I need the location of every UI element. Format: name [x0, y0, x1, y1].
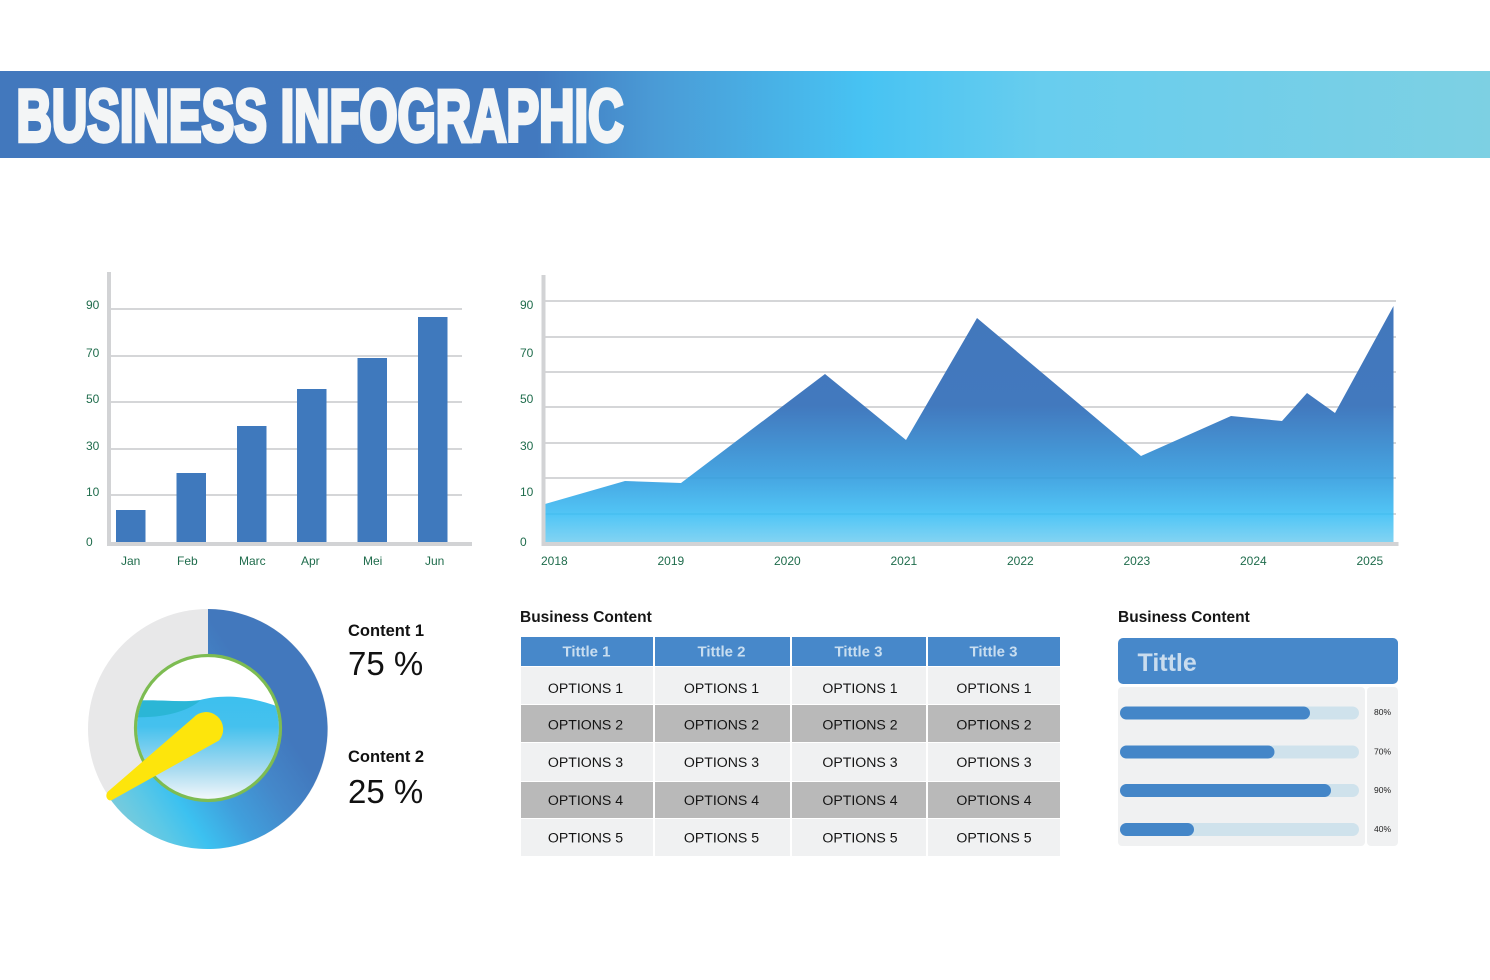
progress panel: 70% [1374, 746, 1391, 756]
area chart: 2022 [1007, 554, 1034, 568]
table: OPTIONS 2 [548, 716, 623, 732]
donut legend: 75 % [348, 645, 423, 682]
table heading: Business Content [520, 609, 652, 626]
table: OPTIONS 5 [956, 830, 1032, 846]
table: Tittle 1 [562, 644, 611, 660]
area chart: 2025 [1356, 554, 1384, 568]
area chart: 10 [520, 485, 534, 499]
table: OPTIONS 3 [822, 754, 898, 770]
progress panel: 80% [1374, 707, 1391, 717]
donut chart [88, 609, 328, 849]
table: OPTIONS 2 [822, 716, 898, 732]
table: OPTIONS 1 [956, 680, 1032, 696]
area chart: 0 [520, 535, 527, 549]
progress panel: 40% [1374, 824, 1391, 834]
area chart: 2018 [541, 554, 568, 568]
area chart: 50 [520, 392, 534, 406]
table: OPTIONS 4 [684, 792, 759, 808]
area chart: 2023 [1124, 554, 1151, 568]
area chart: 90 [520, 298, 534, 312]
table: OPTIONS 1 [684, 680, 759, 696]
area chart: 2019 [658, 554, 685, 568]
bar chart: 90 [86, 298, 100, 312]
table: OPTIONS 4 [822, 792, 898, 808]
table: OPTIONS 3 [956, 754, 1032, 770]
table: OPTIONS 5 [548, 830, 623, 846]
area chart: 2024 [1240, 554, 1267, 568]
table: OPTIONS 1 [822, 680, 898, 696]
donut legend: Content 1 [348, 622, 424, 640]
bar chart: 70 [86, 346, 100, 360]
progress heading: Business Content [1118, 609, 1250, 626]
table: OPTIONS 3 [684, 754, 759, 770]
table: Tittle 3 [969, 644, 1018, 660]
bar chart: Jan [121, 554, 140, 568]
bar chart [86, 272, 472, 568]
area chart: 2020 [774, 554, 801, 568]
table: OPTIONS 5 [684, 830, 759, 846]
bar chart: Apr [301, 554, 320, 568]
area chart: 2021 [890, 554, 918, 568]
bar chart: Mei [363, 554, 382, 568]
bar chart: 50 [86, 392, 100, 406]
bar chart: 10 [86, 485, 100, 499]
donut legend: 25 % [348, 773, 423, 810]
title banner [0, 71, 1490, 158]
area chart: 30 [520, 439, 534, 453]
donut legend [348, 622, 424, 810]
title: BUSINESS INFOGRAPHIC [16, 76, 624, 157]
progress panel: 90% [1374, 785, 1391, 795]
icon: yellow needle [106, 712, 223, 800]
area chart [520, 275, 1398, 568]
bar chart: Feb [177, 554, 198, 568]
table: OPTIONS 5 [822, 830, 898, 846]
progress panel [1118, 638, 1398, 846]
bar chart: Jun [425, 554, 444, 568]
table: OPTIONS 4 [548, 792, 623, 808]
progress panel: Tittle [1138, 649, 1197, 677]
table: OPTIONS 4 [956, 792, 1032, 808]
table: Tittle 2 [697, 644, 746, 660]
table: OPTIONS 3 [548, 754, 623, 770]
area chart: 70 [520, 346, 534, 360]
bar chart: 0 [86, 535, 93, 549]
donut legend: Content 2 [348, 748, 424, 766]
table [521, 637, 1060, 856]
table: OPTIONS 2 [684, 716, 759, 732]
bar chart: 30 [86, 439, 100, 453]
table: OPTIONS 1 [548, 680, 623, 696]
table: Tittle 3 [834, 644, 883, 660]
table: OPTIONS 2 [956, 716, 1032, 732]
bar chart: Marc [239, 554, 266, 568]
